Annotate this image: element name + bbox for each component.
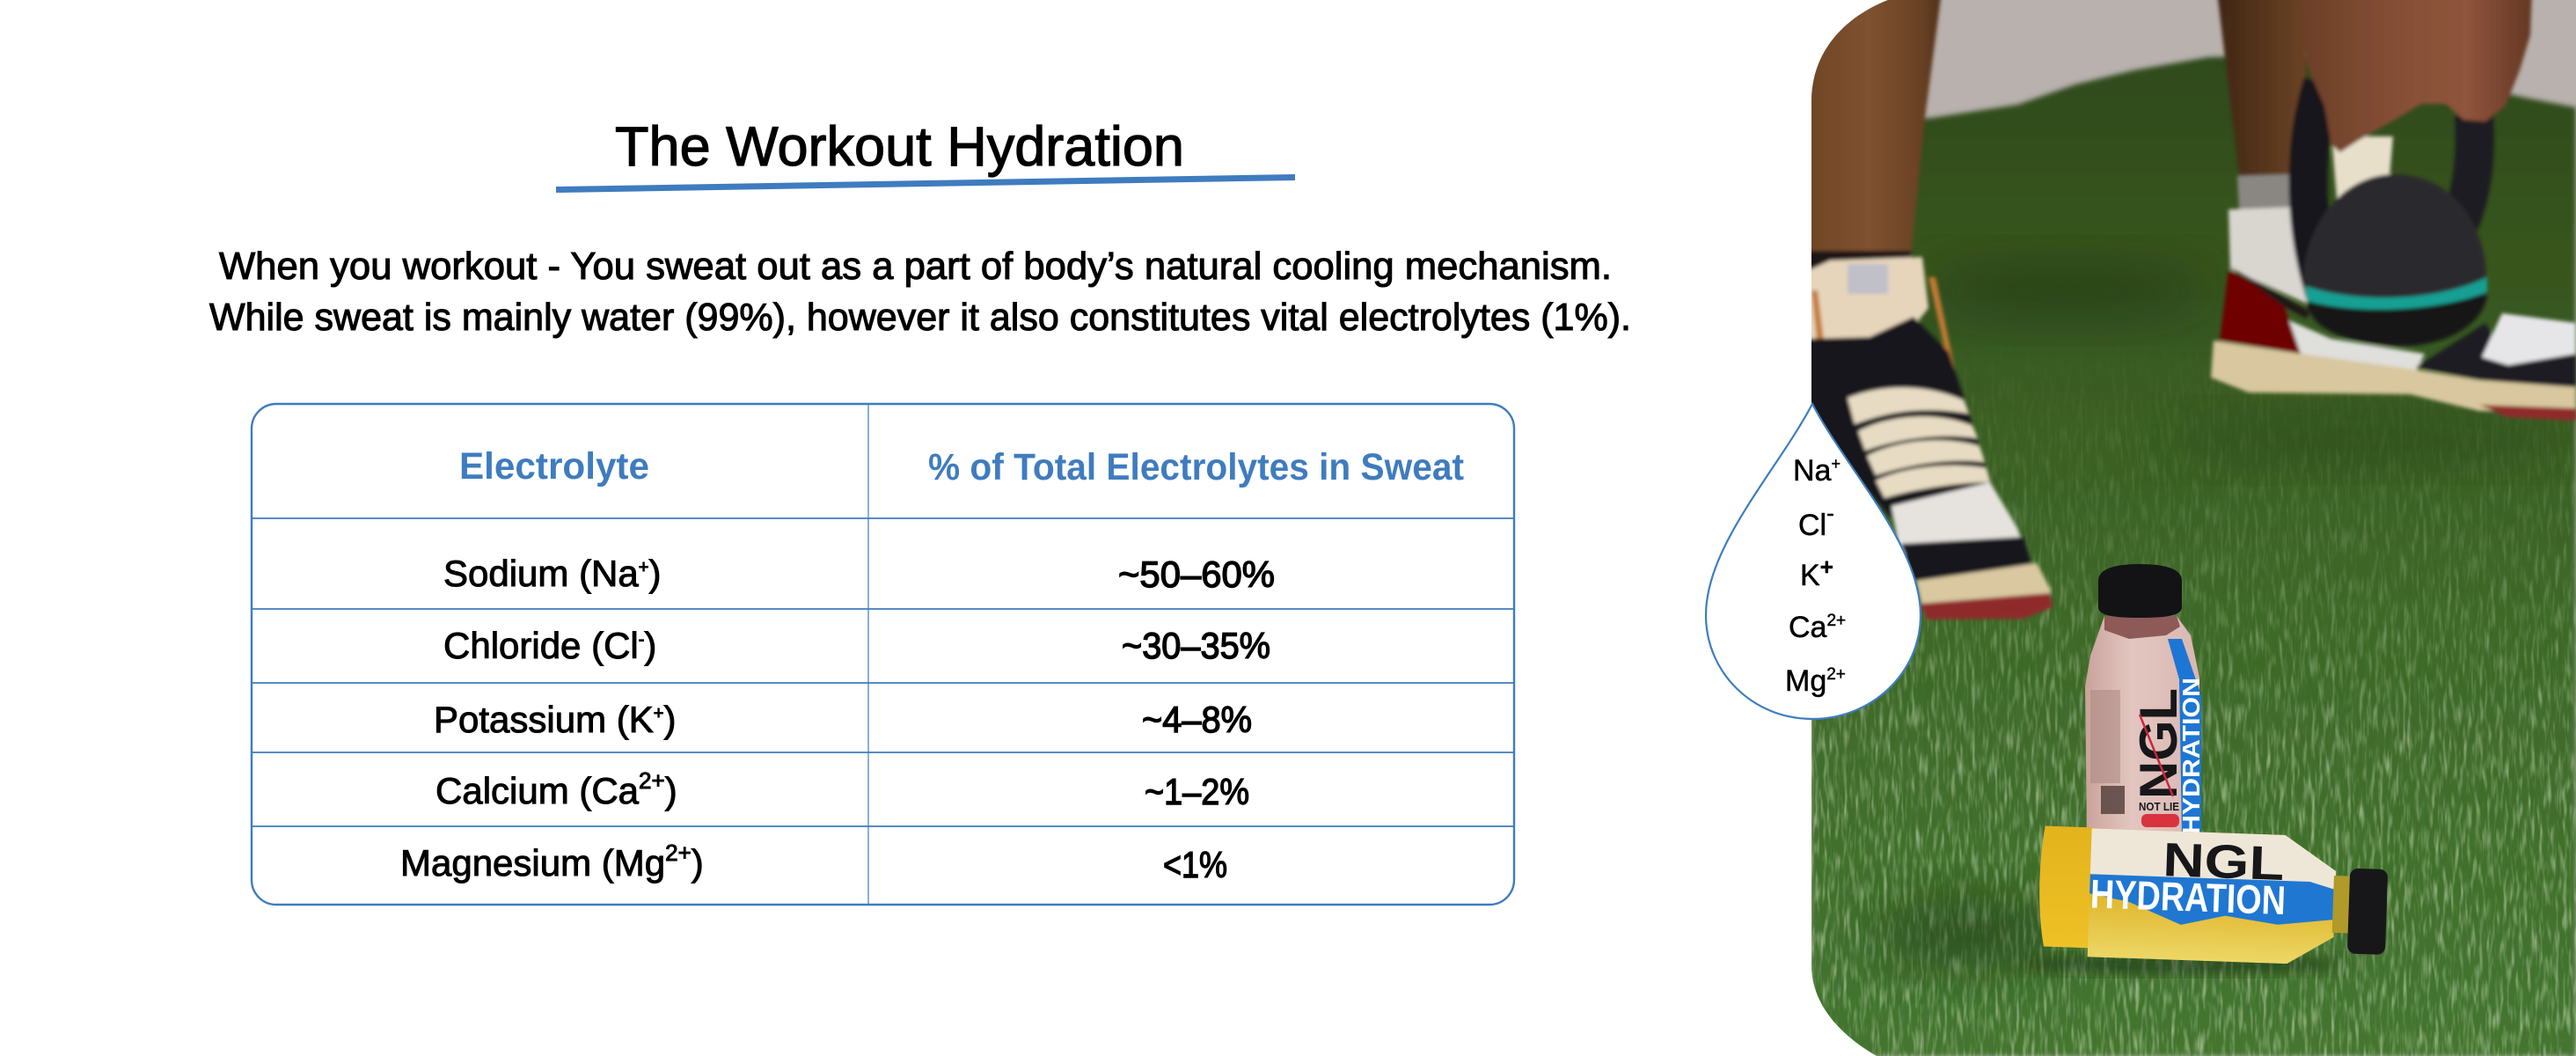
ion labels: Cl — [1798, 509, 1826, 542]
nutrition panel — [2090, 690, 2120, 783]
right leg — [2217, 0, 2307, 176]
row: sodium: Sodium (Na — [443, 553, 639, 594]
table header: Electrolyte — [459, 445, 649, 488]
title underline — [556, 174, 1295, 193]
ion labels: Mg — [1785, 664, 1826, 698]
ion labels: 2+ — [1826, 612, 1846, 630]
row: chloride: ~30–35% — [1122, 625, 1270, 666]
left leg — [1811, 0, 1943, 253]
row: magnesium: 2+ — [665, 840, 692, 866]
bottle label: brand: NOT LIE — [2139, 800, 2179, 813]
bottle label: HYDRATION: HYDRATION — [2089, 870, 2287, 923]
row: calcium: Calcium (Ca — [435, 770, 639, 811]
ion labels: K — [1800, 559, 1820, 592]
row: magnesium: Magnesium (Mg — [400, 842, 665, 884]
ion labels: 2+ — [1826, 665, 1846, 684]
ion labels: Ca — [1789, 611, 1826, 644]
upright pink bottle — [2085, 564, 2205, 834]
intro paragraph — [209, 245, 1631, 339]
bottle label: HYDRATION: HYDRATION — [2177, 678, 2205, 834]
row: magnesium — [400, 840, 1227, 885]
kettlebell — [2303, 84, 2487, 346]
intro paragraph: While sweat is mainly water (99%), however it also constitutes vital electrolytes (1%). — [209, 296, 1631, 339]
table header — [459, 445, 1464, 488]
title: The Workout Hydration — [615, 116, 1184, 178]
ion labels: - — [1826, 500, 1834, 526]
row: sodium — [443, 553, 1275, 595]
row: calcium: 2+ — [639, 767, 665, 794]
ion labels: + — [1820, 554, 1833, 580]
QR code — [2101, 786, 2125, 814]
row: calcium: ~1–2% — [1145, 771, 1249, 812]
bottle label: NGL: NGL — [2129, 688, 2188, 799]
row: magnesium: ) — [692, 842, 704, 884]
lying yellow bottle — [2037, 825, 2389, 967]
flavour badge — [2141, 814, 2179, 827]
row: magnesium: <1% — [1163, 844, 1227, 885]
row: chloride: - — [639, 630, 644, 649]
row: sodium: ) — [648, 553, 661, 594]
row: potassium: + — [654, 704, 663, 723]
row: chloride: ) — [644, 625, 656, 666]
electrolyte drop — [1706, 404, 1921, 719]
row: potassium — [434, 699, 1252, 740]
intro paragraph: When you workout - You sweat out as a part of body’s natural cooling mechanism. — [219, 245, 1612, 288]
ion labels: Na — [1793, 454, 1831, 488]
bottle label: NGL: NGL — [2162, 833, 2285, 891]
row: potassium: Potassium (K — [434, 699, 654, 740]
ion labels — [1785, 454, 1846, 698]
ion labels: + — [1831, 455, 1841, 473]
right shoe — [2211, 174, 2576, 421]
legs, shoes and kettlebell (out of focus) — [1795, 0, 2576, 620]
table header: % of Total Electrolytes in Sweat — [928, 446, 1464, 488]
row: potassium: ~4–8% — [1142, 699, 1252, 740]
row: chloride: Chloride (Cl — [443, 625, 639, 666]
product photo — [1795, 0, 2576, 1056]
row: calcium — [435, 767, 1249, 812]
electrolyte table — [252, 404, 1514, 905]
hand — [2301, 0, 2532, 152]
row: chloride — [443, 625, 1270, 666]
row: sodium: ~50–60% — [1118, 554, 1275, 595]
row: calcium: ) — [665, 770, 677, 811]
row: sodium: + — [639, 558, 648, 577]
left shoe — [1804, 251, 2053, 620]
row: potassium: ) — [663, 699, 676, 740]
grass — [1811, 53, 2576, 1056]
